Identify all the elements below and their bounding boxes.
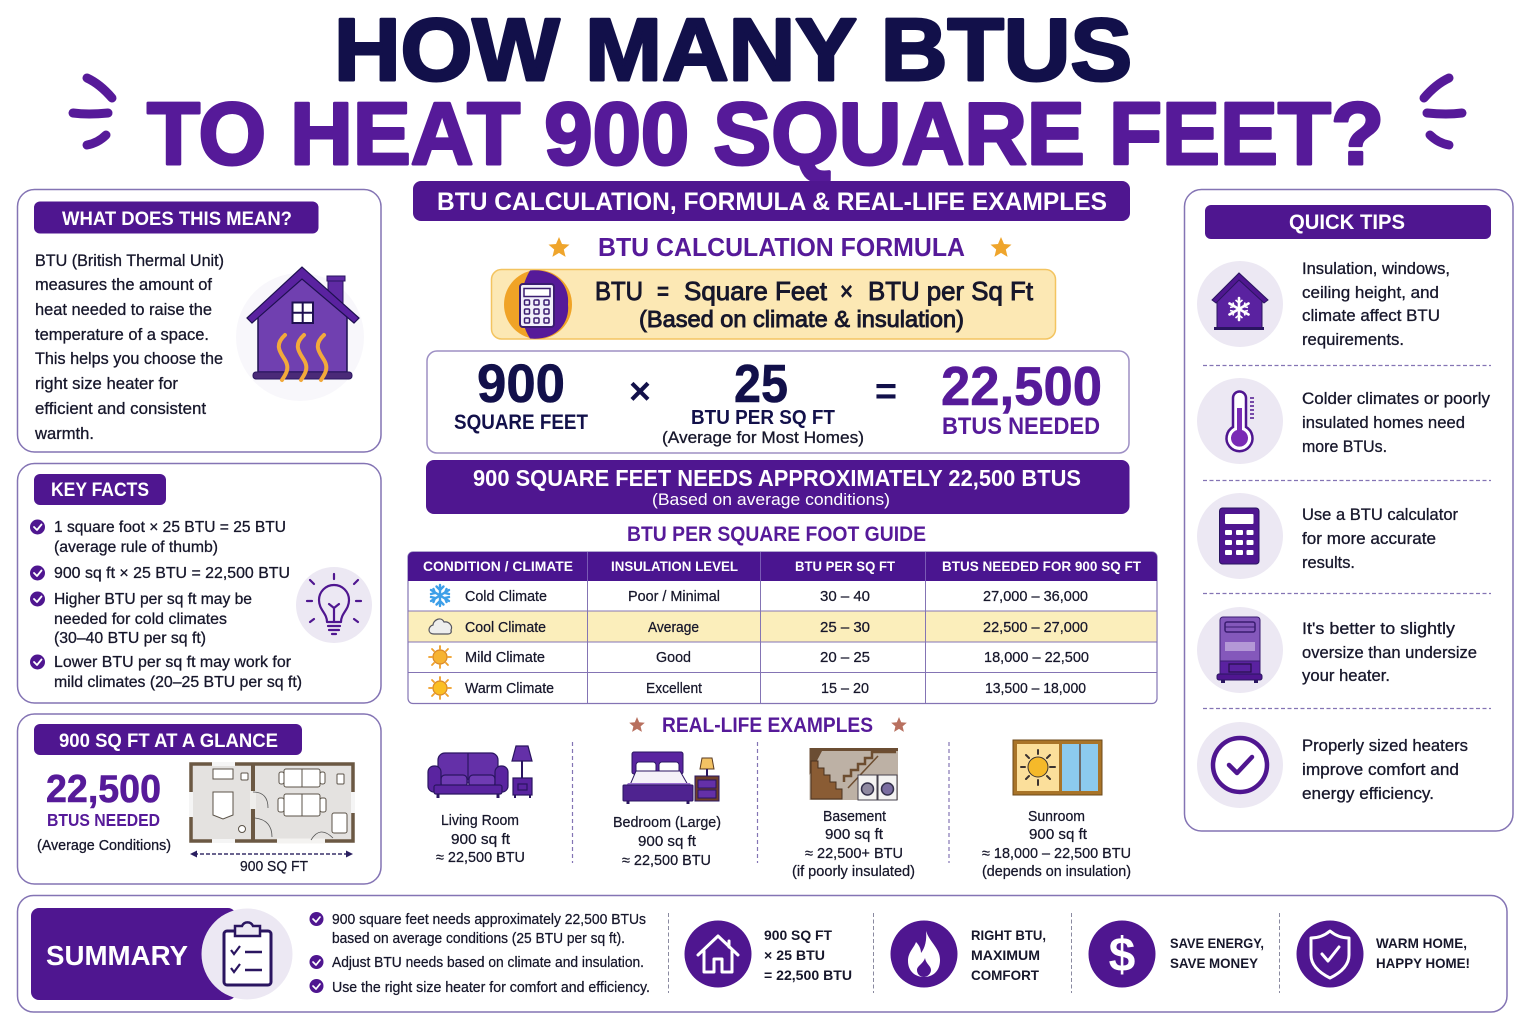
text: living room: 900 sq ft: [451, 832, 510, 848]
panel: what does this mean: [18, 190, 381, 452]
heading: what does this mean: [34, 202, 318, 234]
text: basement: (if poorly insulated): [792, 864, 915, 880]
value: 900 square feet: SQUARE FEET: [454, 411, 588, 434]
tip: calculator: [1197, 493, 1459, 579]
heading: quick tips: [1205, 205, 1491, 239]
text: BTU definition: measures the amount of: [35, 275, 212, 294]
table rows text: 18,000 – 22,500: [984, 650, 1089, 666]
bullet list: summary: 900 square feet needs approximately 22,500 BTUs: [332, 912, 646, 928]
table header: [408, 552, 1157, 581]
text: BTU definition: warmth.: [34, 424, 94, 443]
banner: result: 900 SQUARE FEET NEEDS APPROXIMATELY 22,500 BTUS: [473, 465, 1081, 491]
text: bedroom: Bedroom (Large): [613, 815, 721, 831]
arrow: floor plan width: 900 SQ FT: [240, 859, 308, 875]
equals sign: =: [875, 371, 897, 413]
panel: key facts: [18, 464, 381, 703]
icon: snowflake: [431, 585, 449, 606]
text: heater size tip: your heater.: [1302, 667, 1390, 685]
icon: sofa and lamp: [428, 746, 532, 798]
icon: clipboard: [202, 908, 292, 1000]
stat: 22,500 btus needed: BTUS NEEDED: [47, 810, 160, 830]
formula text: ×: [840, 276, 853, 306]
text: properly sized tip: [1302, 737, 1468, 803]
banner: result: (Based on average conditions): [652, 490, 890, 509]
table rows text: 30 – 40: [820, 589, 870, 605]
badge: right btu: MAXIMUM: [971, 947, 1040, 963]
example: bedroom: [613, 752, 721, 869]
text: living room: [436, 813, 525, 866]
text: calculator tip: [1302, 506, 1459, 572]
table rows text: Average: [648, 620, 699, 636]
banner: result: [426, 460, 1130, 514]
text: heater size tip: [1302, 620, 1477, 685]
table rows text: Excellent: [646, 681, 702, 697]
text: living room: ≈ 22,500 BTU: [436, 850, 525, 866]
icon: house with heat waves: [236, 267, 364, 401]
banner: subtitle: [413, 181, 1130, 221]
bullet list: key facts: Lower BTU per sq ft may work for: [54, 654, 292, 671]
text: colder climates tip: insulated homes need: [1302, 414, 1465, 432]
banner: subtitle: BTU CALCULATION, FORMULA & REAL-LIFE EXAMPLES: [437, 188, 1107, 216]
formula box: [492, 270, 1056, 339]
example: sunroom: [982, 740, 1131, 880]
badge: calculation recap: [684, 920, 852, 988]
example: living room: [428, 746, 532, 866]
stat: 22,500 btus needed: [37, 768, 171, 854]
text: BTU definition: temperature of a space.: [35, 325, 209, 344]
table rows text: Mild Climate: [465, 650, 545, 666]
heading: at a glance: [34, 724, 302, 755]
title: [147, 0, 1384, 183]
text: BTU definition: right size heater for: [35, 374, 178, 393]
text: living room: Living Room: [441, 813, 519, 829]
summary label: SUMMARY: [46, 940, 188, 971]
bullet list: summary: Adjust BTU needs based on climate and insulation.: [332, 955, 644, 971]
panel: at a glance: [18, 714, 381, 884]
value: 25 btu per sq ft: BTU PER SQ FT: [691, 407, 835, 429]
badge: right btu: [890, 920, 1046, 988]
icon: left burst: [73, 78, 112, 145]
table rows text: 27,000 – 36,000: [983, 589, 1088, 605]
text: sunroom: Sunroom: [1028, 809, 1085, 825]
badge: save energy: SAVE ENERGY,: [1170, 935, 1264, 951]
text: insulation tip: climate affect BTU: [1302, 307, 1440, 325]
text: calculator tip: results.: [1302, 554, 1355, 572]
value: 25 btu per sq ft: [662, 354, 864, 447]
text: insulation tip: ceiling height, and: [1302, 284, 1439, 302]
bullet list: key facts: [30, 519, 302, 691]
formula text: (Based on climate & insulation): [639, 306, 964, 332]
icon: sunroom window: [1013, 740, 1102, 795]
badge: save energy: [1088, 920, 1264, 988]
bullet list: summary: [310, 912, 650, 996]
icon: snow house: [1197, 261, 1283, 347]
text: BTU definition: heat needed to raise the: [35, 300, 212, 319]
text: sunroom: (depends on insulation): [982, 864, 1131, 880]
heading: key facts: [34, 474, 166, 505]
badge: calculation recap: = 22,500 BTU: [764, 967, 852, 983]
heading: what does this mean: WHAT DOES THIS MEAN?: [62, 209, 292, 230]
floor plan: [191, 764, 353, 841]
table header: CONDITION / CLIMATE: [423, 559, 573, 574]
formula text: Square Feet: [684, 276, 828, 306]
panel: worked calculation: [427, 351, 1129, 453]
table rows text: 22,500 – 27,000: [983, 620, 1088, 636]
icon: check circle: [1197, 722, 1283, 808]
table rows text: [465, 589, 1089, 697]
icon: bed and nightstand: [623, 752, 719, 804]
heading: quick tips: QUICK TIPS: [1289, 211, 1405, 234]
tip: heater size: [1197, 607, 1477, 693]
icon: light bulb: [296, 567, 372, 643]
text: bedroom: ≈ 22,500 BTU: [622, 853, 711, 869]
text: basement: ≈ 22,500+ BTU: [805, 846, 903, 862]
stat: 22,500 btus needed: (Average Conditions): [37, 837, 171, 854]
icon: basement stairs and laundry: [810, 748, 898, 800]
stat: 22,500 btus needed: 22,500: [46, 768, 161, 811]
text: BTU definition: [34, 251, 224, 443]
text: BTU definition: efficient and consistent: [35, 399, 206, 418]
text: heater size tip: It's better to slightly: [1302, 620, 1456, 638]
text: properly sized tip: energy efficiency.: [1302, 785, 1434, 803]
badge: save energy: $: [1109, 929, 1136, 982]
heading: key facts: KEY FACTS: [51, 480, 149, 501]
table rows text: Good: [656, 650, 691, 666]
text: heater size tip: oversize than undersize: [1302, 644, 1477, 662]
table header: BTUS NEEDED FOR 900 SQ FT: [942, 559, 1142, 574]
text: insulation tip: requirements.: [1302, 331, 1404, 349]
badge: right btu: RIGHT BTU,: [971, 927, 1046, 943]
badge: save energy: SAVE MONEY: [1170, 955, 1259, 971]
text: BTU definition: BTU (British Thermal Unit): [35, 251, 224, 270]
table rows text: 13,500 – 18,000: [985, 681, 1086, 697]
table rows text: Warm Climate: [465, 681, 554, 697]
panel: quick tips: [1184, 190, 1513, 831]
multiply sign: ×: [629, 371, 651, 413]
formula text: BTU: [595, 276, 643, 306]
tip: colder climates: [1197, 378, 1491, 464]
value: 22,500 btus needed: 22,500: [941, 355, 1102, 417]
text: colder climates tip: Colder climates or poorly: [1302, 390, 1491, 408]
text: insulation tip: [1302, 260, 1450, 349]
bullet list: key facts: (30–40 BTU per sq ft): [54, 630, 206, 647]
bullet list: summary: Use the right size heater for comfort and efficiency.: [332, 980, 650, 996]
badge: calculation recap: × 25 BTU: [764, 947, 825, 963]
text: colder climates tip: [1302, 390, 1491, 456]
table header: BTU PER SQ FT: [795, 559, 896, 574]
text: properly sized tip: improve comfort and: [1302, 761, 1459, 779]
text: calculator tip: for more accurate: [1302, 530, 1436, 548]
heading: real-life examples: REAL-LIFE EXAMPLES: [662, 714, 873, 737]
text: sunroom: [982, 809, 1131, 880]
bullet list: key facts: (average rule of thumb): [54, 539, 218, 556]
icon: mild sun: [429, 646, 451, 668]
badge: warm home: [1296, 920, 1470, 988]
badge: right btu: COMFORT: [971, 967, 1039, 983]
icon: calculator: [1197, 493, 1283, 579]
bullet list: key facts: Higher BTU per sq ft may be: [54, 591, 252, 608]
bullet list: key facts: needed for cold climates: [54, 611, 227, 628]
table rows text: 20 – 25: [820, 650, 870, 666]
formula text: =: [657, 276, 669, 306]
value: 25 btu per sq ft: (Average for Most Homes): [662, 428, 864, 447]
text: basement: 900 sq ft: [825, 827, 883, 843]
badge: calculation recap: 900 SQ FT: [764, 927, 832, 943]
value: 900 square feet: [454, 354, 588, 434]
table rows text: 25 – 30: [820, 620, 870, 636]
icon: heater: [1197, 607, 1283, 693]
bullet list: summary: based on average conditions (25 BTU per sq ft).: [332, 931, 625, 947]
tip: properly sized: [1197, 722, 1468, 808]
value: 25 btu per sq ft: 25: [734, 354, 788, 414]
badge: warm home: HAPPY HOME!: [1376, 955, 1470, 971]
tip: insulation: [1197, 260, 1450, 349]
text: colder climates tip: more BTUs.: [1302, 438, 1387, 456]
title: TO HEAT 900 SQUARE FEET?: [147, 84, 1384, 183]
arrow: floor plan width: [190, 850, 353, 875]
icon: thermometer: [1197, 378, 1283, 464]
icon: warm sun: [429, 677, 451, 699]
table rows text: Cold Climate: [465, 589, 547, 605]
panel: summary: [18, 896, 1507, 1012]
text: bedroom: 900 sq ft: [638, 834, 696, 850]
icon: cloud: [429, 619, 452, 634]
table header: INSULATION LEVEL: [611, 559, 738, 574]
heading: formula: BTU CALCULATION FORMULA: [598, 232, 965, 262]
text: basement: Basement: [823, 809, 886, 825]
formula text: [595, 276, 1034, 332]
title: HOW MANY BTUS: [334, 0, 1132, 99]
icon: right burst: [1424, 78, 1462, 145]
text: bedroom: [613, 815, 721, 869]
bullet list: key facts: 1 square foot × 25 BTU = 25 BTU: [54, 519, 286, 536]
example: basement: [792, 748, 915, 880]
bullet list: key facts: mild climates (20–25 BTU per sq ft): [54, 674, 302, 691]
table rows text: Cool Climate: [465, 620, 546, 636]
table rows text: 15 – 20: [821, 681, 869, 697]
text: calculator tip: Use a BTU calculator: [1302, 506, 1459, 524]
text: basement: [792, 809, 915, 880]
text: sunroom: ≈ 18,000 – 22,500 BTU: [982, 846, 1131, 862]
text: BTU definition: This helps you choose the: [35, 349, 223, 368]
text: insulation tip: Insulation, windows,: [1302, 260, 1450, 278]
value: 22,500 btus needed: BTUS NEEDED: [942, 413, 1100, 440]
formula text: BTU per Sq Ft: [868, 276, 1034, 306]
table: btu guide: [408, 552, 1157, 704]
text: sunroom: 900 sq ft: [1029, 827, 1087, 843]
table rows text: Poor / Minimal: [628, 589, 720, 605]
summary label: [31, 908, 236, 1000]
value: 900 square feet: 900: [477, 354, 565, 414]
heading: guide: BTU PER SQUARE FOOT GUIDE: [627, 523, 926, 546]
bullet list: key facts: 900 sq ft × 25 BTU = 22,500 BTU: [54, 565, 290, 582]
icon: calculator: [504, 270, 572, 339]
heading: at a glance: 900 SQ FT AT A GLANCE: [59, 731, 278, 752]
badge: warm home: WARM HOME,: [1376, 935, 1467, 951]
text: properly sized tip: Properly sized heaters: [1302, 737, 1468, 755]
